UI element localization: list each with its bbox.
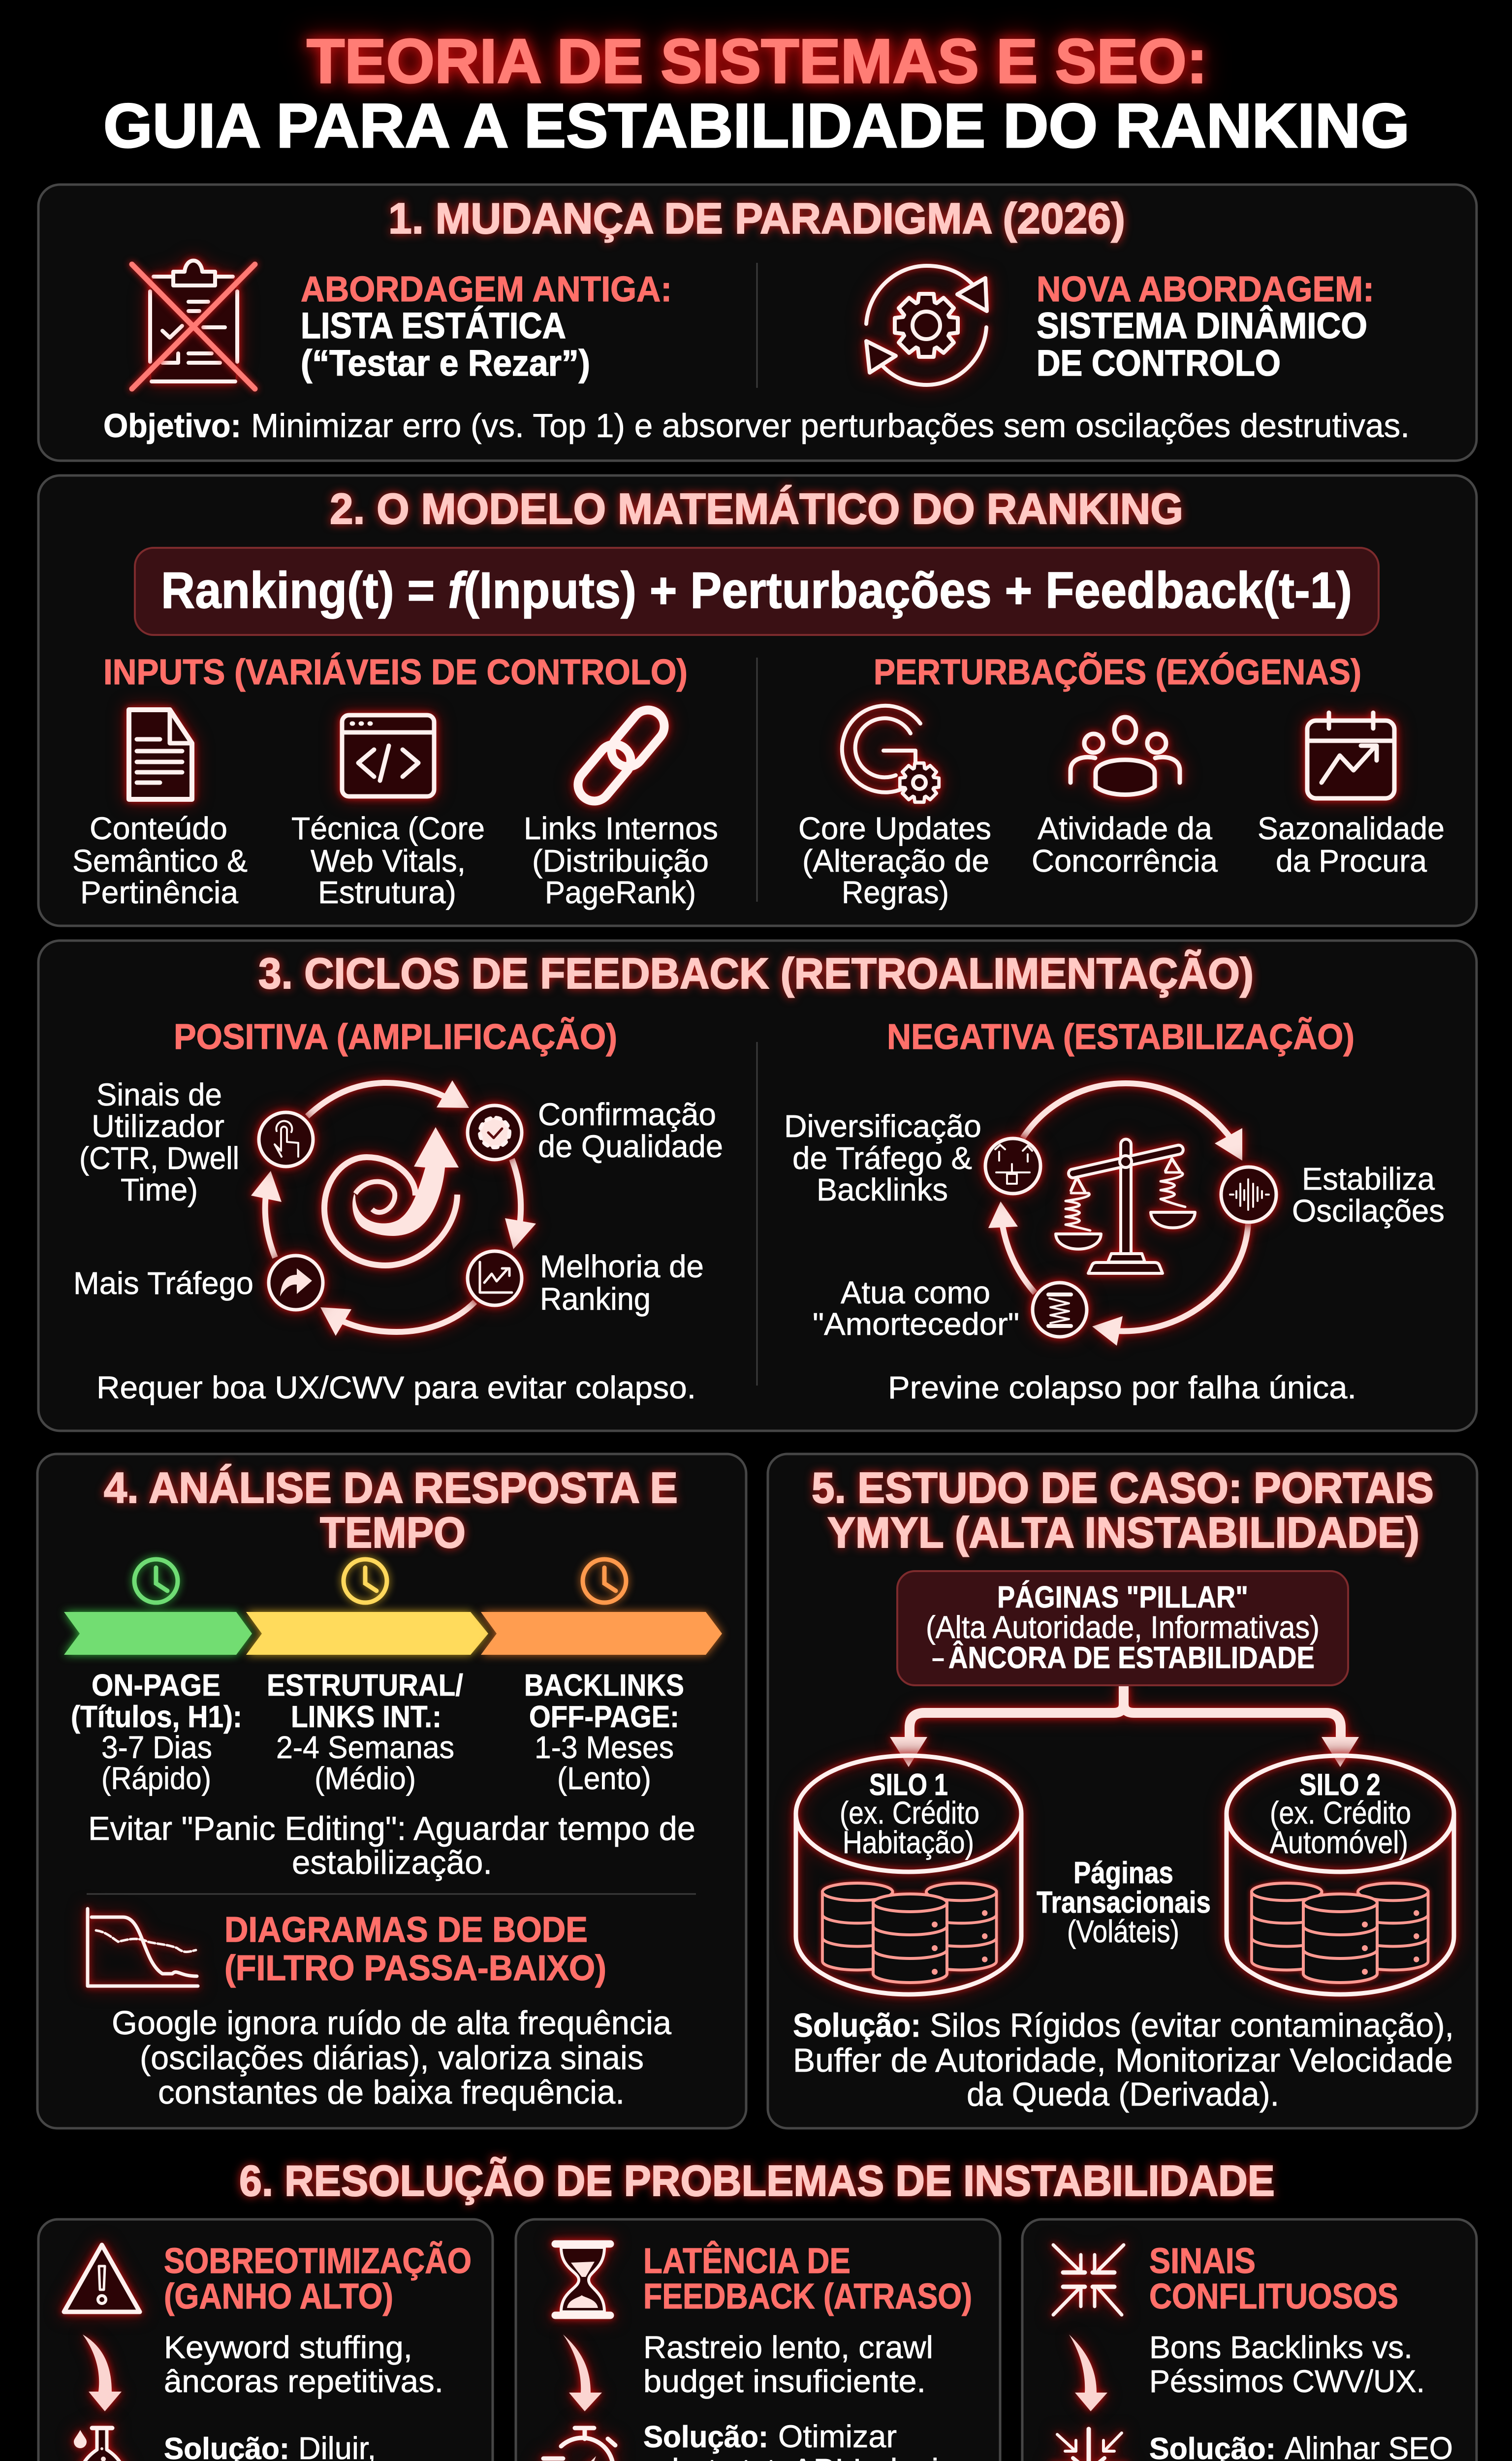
card text: Péssimos CWV/UX. <box>1149 2364 1425 2399</box>
card text <box>1149 2241 1453 2461</box>
positive labels: de Qualidade <box>538 1129 723 1164</box>
heading 3: 3. CICLOS DE FEEDBACK (RETROALIMENTAÇÃO) <box>258 949 1254 998</box>
solution text: da Queda (Derivada). <box>967 2076 1279 2113</box>
icon: aligned arrows <box>1051 2429 1127 2461</box>
timeline column 3: BACKLINKS <box>524 1669 684 1703</box>
solution text: Buffer de Autoridade, Monitorizar Velocidade <box>793 2042 1453 2079</box>
input labels <box>72 811 718 910</box>
node: stabilize <box>1221 1167 1276 1222</box>
objective line: Objetivo: <box>103 407 241 444</box>
timeline column 1: ON-PAGE <box>92 1669 220 1703</box>
title line 2: GUIA PARA A ESTABILIDADE DO RANKING <box>103 91 1410 160</box>
bode text: (oscilações diárias), valoriza sinais <box>140 2039 644 2077</box>
input labels: Web Vitals, <box>311 843 466 879</box>
disturbance labels: (Alteração de <box>802 843 989 879</box>
negative labels: de Tráfego & <box>792 1140 972 1176</box>
card text: FEEDBACK (ATRASO) <box>643 2277 972 2316</box>
solution text: Silos Rígidos (evitar contaminação), <box>930 2007 1454 2044</box>
negative heading: NEGATIVA (ESTABILIZAÇÃO) <box>887 1017 1354 1057</box>
heading 1: 1. MUDANÇA DE PARADIGMA (2026) <box>388 194 1125 243</box>
icon: document <box>129 710 192 799</box>
bode text <box>112 2004 671 2111</box>
icon: chain link <box>571 703 671 808</box>
timeline column 2 <box>267 1669 463 1796</box>
captions: Requer boa UX/CWV para evitar colapso. <box>96 1370 696 1405</box>
silo 1 text: Habitação) <box>843 1825 974 1860</box>
silo 2 text: SILO 2 <box>1299 1768 1381 1802</box>
timeline column 2: ESTRUTURAL/ <box>267 1669 463 1703</box>
positive labels: Confirmação <box>538 1097 716 1132</box>
disturbance labels <box>798 811 1445 910</box>
icon: crossed clipboard <box>132 261 255 389</box>
card text: budget insuficiente. <box>643 2364 926 2399</box>
icon: code window <box>342 715 434 796</box>
icon: calendar chart <box>1307 713 1394 798</box>
arrow down <box>563 2335 602 2411</box>
silo 2 text: Automóvel) <box>1270 1825 1408 1860</box>
negative labels: Estabiliza <box>1302 1161 1435 1197</box>
disturbance labels: da Procura <box>1276 843 1427 879</box>
new approach text: SISTEMA DINÂMICO <box>1037 305 1367 346</box>
heading 5: YMYL (ALTA INSTABILIDADE) <box>827 1508 1419 1557</box>
new approach text: DE CONTROLO <box>1037 343 1281 383</box>
new approach text <box>1037 270 1374 383</box>
transactional pages label: Páginas <box>1073 1856 1173 1890</box>
panel: 5. estudo de caso <box>768 1454 1477 2128</box>
node: diversification <box>985 1138 1040 1194</box>
pillar box: - <box>931 1640 945 1675</box>
spiral with arrow <box>324 1127 459 1265</box>
new approach text: NOVA ABORDAGEM: <box>1037 270 1374 309</box>
panic editing note: estabilização. <box>292 1844 492 1881</box>
heading 5 <box>812 1463 1434 1557</box>
bode heading: DIAGRAMAS DE BODE <box>224 1910 588 1950</box>
timeline chevrons <box>64 1612 722 1655</box>
heading 2: 2. O MODELO MATEMÁTICO DO RANKING <box>330 484 1183 533</box>
positive labels <box>73 1077 723 1317</box>
node: ranking <box>468 1251 522 1305</box>
input labels: Links Internos <box>524 811 718 846</box>
positive labels: Melhoria de <box>540 1249 704 1284</box>
solution text <box>793 2007 1454 2113</box>
heading 5: 5. ESTUDO DE CASO: PORTAIS <box>812 1463 1434 1512</box>
database stacks <box>1252 1883 1428 1983</box>
objective line: Minimizar erro (vs. Top 1) e absorver perturbações sem oscilações destrutivas. <box>251 407 1410 444</box>
input labels: Estrutura) <box>318 875 456 910</box>
panic editing note: Evitar "Panic Editing": Aguardar tempo de <box>88 1810 695 1847</box>
old approach text: LISTA ESTÁTICA <box>301 305 566 346</box>
card text: Rastreio lento, crawl <box>643 2330 933 2365</box>
disturbance labels: Regras) <box>842 875 949 910</box>
old approach text: (“Testar e Rezar”) <box>301 343 590 383</box>
negative labels: Atua como <box>841 1275 990 1310</box>
negative labels <box>784 1108 1445 1342</box>
timeline column 2: (Médio) <box>315 1761 416 1796</box>
timeline column 3: 1-3 Meses <box>535 1730 674 1765</box>
node: traffic <box>269 1256 323 1310</box>
pillar box: PÁGINAS "PILLAR" <box>997 1580 1248 1614</box>
formula box <box>135 548 1379 635</box>
positive labels: (CTR, Dwell <box>79 1140 239 1176</box>
pillar box: ÂNCORA DE ESTABILIDADE <box>948 1641 1315 1675</box>
disturbances heading: PERTURBAÇÕES (EXÓGENAS) <box>874 652 1361 692</box>
panel: 3. ciclos de feedback <box>38 941 1477 1431</box>
transactional pages label: Transacionais <box>1037 1886 1211 1920</box>
card text: Keyword stuffing, <box>164 2330 412 2365</box>
icon: warning triangle <box>64 2245 140 2312</box>
silo 2 <box>1227 1756 1454 1994</box>
icon: hourglass <box>555 2244 610 2315</box>
card text: (GANHO ALTO) <box>164 2277 393 2316</box>
positive labels: Utilizador <box>92 1108 224 1144</box>
connector arrows <box>890 1685 1359 1767</box>
card text: SINAIS <box>1149 2241 1256 2281</box>
input labels: Semântico & <box>72 843 248 879</box>
bode heading: (FILTRO PASSA-BAIXO) <box>224 1949 606 1988</box>
panel: 4. análise da resposta <box>37 1454 746 2128</box>
card text <box>643 2241 983 2461</box>
timeline column 3: (Lento) <box>557 1761 651 1796</box>
disturbance labels: Core Updates <box>798 811 991 846</box>
inputs heading: INPUTS (VARIÁVEIS DE CONTROLO) <box>103 653 688 692</box>
timeline column 3 <box>524 1669 684 1796</box>
icon: balance scale <box>1056 1139 1195 1273</box>
diagram: positive loop <box>73 1077 723 1336</box>
positive labels: Mais Tráfego <box>73 1265 253 1301</box>
card text: Solução: <box>643 2420 768 2454</box>
bode text: Google ignora ruído de alta frequência <box>112 2004 671 2042</box>
heading 6: 6. RESOLUÇÃO DE PROBLEMAS DE INSTABILIDADE <box>239 2156 1275 2205</box>
captions: Previne colapso por falha única. <box>888 1370 1356 1405</box>
solution text: Solução: <box>793 2007 921 2044</box>
icon: stopwatch <box>537 2428 615 2461</box>
card text: Bons Backlinks vs. <box>1149 2330 1413 2365</box>
input labels: Técnica (Core <box>291 811 485 846</box>
silo 1 text <box>840 1768 979 1860</box>
silo 2 text: (ex. Crédito <box>1270 1795 1411 1830</box>
heading 4: 4. ANÁLISE DA RESPOSTA E <box>104 1463 678 1512</box>
arrow down <box>83 2335 122 2411</box>
positive labels: Sinais de <box>96 1077 222 1112</box>
input labels: Pertinência <box>80 875 238 910</box>
silo 2 text <box>1270 1768 1411 1860</box>
card: sobreotimização <box>38 2219 493 2461</box>
icon: people <box>1071 717 1180 794</box>
card text: LATÊNCIA DE <box>643 2241 850 2281</box>
card text: Otimizar <box>778 2419 897 2454</box>
negative labels: "Amortecedor" <box>813 1306 1019 1342</box>
silo 1 <box>796 1756 1021 1994</box>
heading 4: TEMPO <box>320 1508 466 1557</box>
card text: âncoras repetitivas. <box>164 2364 443 2399</box>
clock icons <box>134 1559 626 1603</box>
title line 1: TEORIA DE SISTEMAS E SEO: <box>307 26 1207 96</box>
captions <box>96 1370 1356 1405</box>
card: sinais conflituosos <box>1022 2219 1477 2461</box>
timeline column 1: (Rápido) <box>101 1761 211 1796</box>
loop arrows <box>988 1083 1248 1346</box>
old approach text: ABORDAGEM ANTIGA: <box>301 270 672 309</box>
database stacks <box>822 1883 996 1983</box>
loop arrows <box>251 1080 536 1336</box>
positive heading: POSITIVA (AMPLIFICAÇÃO) <box>174 1017 617 1057</box>
icon: bode diagram <box>88 1909 198 1986</box>
negative labels: Backlinks <box>817 1172 948 1207</box>
arrow down <box>1069 2335 1107 2411</box>
negative labels: Diversificação <box>784 1108 981 1144</box>
timeline column 1: (Títulos, H1): <box>71 1700 242 1734</box>
heading 4 <box>104 1463 678 1557</box>
timeline column 1: 3-7 Dias <box>101 1730 212 1765</box>
disturbance labels: Concorrência <box>1032 843 1218 879</box>
icon: gear cycle <box>866 266 987 385</box>
icon: flask <box>74 2428 125 2461</box>
silo 1 text: (ex. Crédito <box>840 1795 979 1830</box>
timeline column 2: 2-4 Semanas <box>276 1730 454 1765</box>
transactional pages label: (Voláteis) <box>1067 1914 1179 1949</box>
card text: CONFLITUOSOS <box>1149 2277 1398 2316</box>
negative labels: Oscilações <box>1292 1193 1445 1229</box>
old approach text <box>301 270 672 383</box>
transactional pages label <box>1037 1856 1211 1949</box>
positive labels: Ranking <box>540 1281 651 1317</box>
card: latência de feedback <box>516 2219 1000 2461</box>
bode heading <box>224 1910 606 1988</box>
panel: 1. mudança de paradigma <box>38 185 1477 461</box>
bode text: constantes de baixa frequência. <box>158 2074 625 2111</box>
input labels: (Distribuição <box>532 843 709 879</box>
node: quality <box>468 1105 522 1160</box>
card text <box>164 2241 472 2461</box>
icon: google gear <box>842 706 939 802</box>
diagram: negative loop <box>784 1083 1445 1346</box>
positive labels: Time) <box>121 1172 198 1207</box>
input labels: Conteúdo <box>90 811 227 846</box>
timeline column 2: LINKS INT.: <box>291 1700 441 1734</box>
disturbance labels: Sazonalidade <box>1258 811 1445 846</box>
input labels: PageRank) <box>545 875 696 910</box>
timeline column 3: OFF-PAGE: <box>529 1700 679 1734</box>
icon: conflicting arrows <box>1053 2245 1124 2315</box>
pillar box: (Alta Autoridade, Informativas) <box>926 1609 1320 1645</box>
pillar box <box>897 1571 1348 1685</box>
disturbance labels: Atividade da <box>1038 811 1212 846</box>
timeline column 1 <box>71 1669 242 1796</box>
silo 1 text: SILO 1 <box>869 1768 948 1802</box>
node: damper <box>1033 1283 1087 1337</box>
panic editing note <box>88 1810 695 1881</box>
panel: 2. modelo matemático <box>38 475 1477 926</box>
card text: SOBREOTIMIZAÇÃO <box>164 2241 472 2281</box>
node: user signals <box>259 1112 313 1167</box>
formula box: Ranking(t) = f(Inputs) + Perturbações + Feedback(t-1) <box>161 562 1352 619</box>
title <box>103 26 1410 160</box>
